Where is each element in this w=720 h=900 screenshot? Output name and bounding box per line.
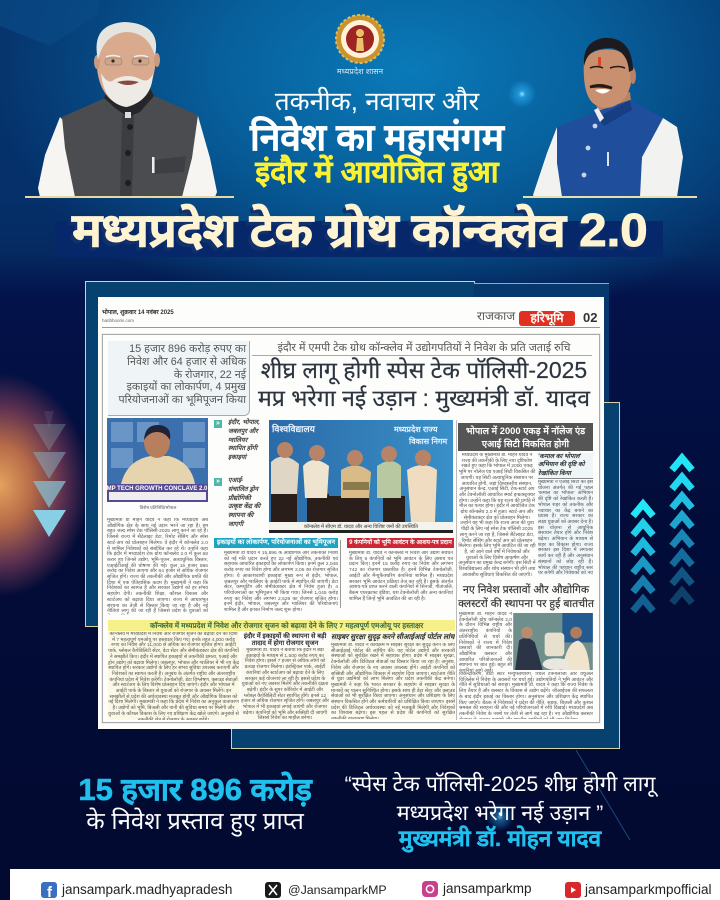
x handle: @JansamparkMP (288, 883, 387, 897)
ribbon text: red: मुख्यमंत्री डॉ. यादव ने कॉन्क्लेव में निवेश और उद्योग संवर्धन के लिए 9 कंपनियों को भूमि आवंटन के लिए आशय पत्र प्रदान किए। इनमें 15 करोड़ रुपए का निवेश और लगभग 742 का रोजगार प्रस्तावित है। इनमें विभिन्न टेक्नोलॉजी, आईटी और मैन्युफैक्चरिंग कंपनियां शामिल हैं। मध्यप्रदेश सरकार भूमि आवंटन प्रक्रिया तेज कर रही है। इसके अंतर्गत आशय-पत्र प्राप्त करने वाली कंपनियों में सिनर्जी, गीतांजलि, बैकम एयरक्राफ्ट इंडिया, यश टेक्नोलॉजी और अन्य कंपनियां शामिल हैं जिन्हें भूमि आवंटित की जा रही है। (349, 551, 453, 602)
quote attribution: मुख्यमंत्री डॉ. मोहन यादव (399, 826, 601, 851)
instagram handle: jansamparkmp (443, 881, 532, 896)
frame: back panel bottom (231, 402, 620, 749)
lower article middle heading: तादाद में होगा रोजगार सृजन (252, 640, 318, 647)
summary box: निवेश और 64 हजार से अधिक (127, 356, 246, 368)
icon: instagram (422, 881, 438, 897)
bullet marker one: » (216, 420, 220, 427)
right column divider (456, 420, 457, 720)
title band (55, 221, 663, 257)
side box heading (538, 453, 593, 479)
icon: facebook (41, 882, 57, 898)
dark box header: भोपाल में 2000 एकड़ में नॉलेज एंड (466, 425, 585, 436)
lower article middle heading (244, 632, 327, 647)
photo: award ceremony: कॉन्क्लेव में सीएम डॉ. यादव और अन्य विशिष्ट जनों की उपस्थिति (304, 523, 418, 530)
ribbon: blue: इकाइयों का लोकार्पण, परियोजनाओं का भूमिपूजन (217, 539, 335, 546)
bullet marker two (214, 478, 222, 486)
ribbon: blue (214, 538, 338, 548)
dark box header: एआई सिटी विकसित होगी (482, 438, 569, 449)
main title: मध्यप्रदेश टेक ग्रोथ कॉन्क्लेव 2.0 (72, 204, 648, 256)
quote: मध्यप्रदेश भरेगा नई उड़ान ” (397, 800, 603, 824)
summary box: के रोजगार, 22 नई (174, 369, 246, 381)
summary box: परियोजनाओं का भूमिपूजन किया (119, 394, 246, 406)
photo: speaker: MP TECH GROWTH CONCLAVE 2.0 (107, 486, 208, 492)
decorative triangles: left (33, 411, 66, 537)
ribbon: red (347, 538, 454, 548)
gold line under right portrait (523, 196, 697, 198)
newspaper logo: हरिभूमि (530, 311, 564, 325)
quote: “स्पेस टेक पॉलिसी-2025 शीघ्र होगी लागू (345, 772, 655, 796)
kicker: इंदौर में एमपी टेक ग्रोथ कॉन्क्लेव में उद्योगपतियों ने निवेश के प्रति जताई रुचि (278, 342, 570, 354)
summary box: 15 हजार 896 करोड़ रुपए का (129, 343, 246, 355)
newspaper website: haribhoomi.com (102, 318, 134, 323)
column heading: new proposals: नए निवेश प्रस्तावों और औद्योगिक (463, 584, 589, 596)
yellow band heading: कॉन्क्लेव में मध्यप्रदेश में निवेश और रोजगार सृजन को बढ़ावा देने के लिए 7 महत्वपूर्ण एमओयू पर हस्ताक्षर (150, 621, 423, 630)
photo: award ceremony: विश्वविद्यालय (271, 423, 316, 434)
emblem caption: मध्यप्रदेश शासन (337, 67, 383, 76)
stat: investment figure: 15 हजार 896 करोड़ (78, 772, 312, 807)
side box heading: रेखांकित किया (538, 470, 571, 477)
dark box header (458, 423, 593, 451)
page number: 02 (583, 310, 597, 325)
summary box: इकाइयों का लोकार्पण, 4 प्रमुख (127, 381, 246, 393)
photo: speaker (107, 418, 208, 502)
bullet marker one (214, 420, 222, 428)
kicker rule (252, 355, 592, 356)
photo: award ceremony (269, 420, 453, 533)
article border (102, 334, 600, 723)
side box heading: 'कमाल का भोपाल' (538, 453, 581, 460)
stat: caption: के निवेश प्रस्ताव हुए प्राप्त (86, 808, 304, 835)
icon: hexagon backdrop (0, 0, 80, 46)
headline: मप्र भरेगा नई उड़ान : मुख्यमंत्री डॉ. यादव (258, 384, 590, 410)
bullet one: इंदौर, भोपाल, जबलपुर और ग्वालियर स्थापित होंगी इकाइयां (228, 419, 260, 461)
headline (258, 357, 590, 412)
headline: शीघ्र लागू होगी स्पेस टेक पॉलिसी-2025 (261, 357, 587, 383)
lower article middle text: मुख्यमंत्री डॉ. यादव ने बताया कि इंदौर में बड़ी इकाइयों के माध्यम से 1,500 करोड़ रुपए का निवेश होगा। इससे 7 हजार से अधिक लोगों को प्रत्यक्ष रोजगार मिलेगा। इंडस्ट्रियल पार्क, आईटी कंपनियां और स्टार्टअप को बढ़ावा देने के लिए सरकार कई योजनाएं ला रही है। इससे प्रदेश के युवाओं को नए अवसर मिलेंगे और तकनीकी दक्षता बढ़ेगी। इंदौर के सुपर कॉरिडोर में आईटी और ग्लोबल कैपेबिलिटी सेंटर स्थापित होंगे। इनसे 12 हजार से अधिक रोजगार सृजित होंगे। जबलपुर और भोपाल में भी इकाइयां लगाई जाएंगी और रोजगार बढ़ेगा। कंपनियों को भूमि और सब्सिडी दी जाएगी जिससे निवेश का माहौल बनेगा। (241, 648, 329, 720)
lower article middle heading: इंदौर में इकाइयों की स्थापना से बड़ी (244, 633, 326, 640)
portrait: left leader (38, 22, 217, 196)
photo: award ceremony: विकास निगम (408, 436, 448, 446)
yellow band heading (108, 620, 455, 631)
column heading: new proposals (458, 583, 594, 610)
newspaper dateline: भोपाल, शुक्रवार 14 नवंबर 2025 (102, 310, 174, 316)
ribbon text: blue: मुख्यमंत्री डॉ यादव ने 15,896 के औद्योगिक और तकनीकी निवेश को नई गति प्रदान करते हुए 22 नई औद्योगिक, तकनीकी एवं सहायक आधारित इकाइयों का लोकार्पण किया। इनमें कुल 2,048 करोड़ रुपए का निवेश होगा और लगभग 2,05 का रोजगार सृजित होगा। ये आकाशवाणी इकाइयां मुख्य रूप से इंदौर, भोपाल, जबलपुर और ग्वालियर के आईटी पार्क में स्थापित की जाएंगी। डेटा सेंटर, कम्प्यूटिंग और सेमीकंडक्टर क्षेत्र में निवेश हुआ है। 4 परियोजनाओं का भूमिपूजन भी किया गया। जिनसे 1,045 करोड़ रुपए का निवेश और लगभग 2,529 का रोजगार सृजित होगा। इनमें इंदौर, भोपाल, जबलपुर और ग्वालियर की परियोजनाएं शामिल हैं और इनका निर्माण जल्द शुरू होगा। (224, 551, 338, 613)
dark box text: मध्यप्रदेश के मुख्यमंत्री डॉ. मोहन यादव ने राज्य की तकनीकी के लिए नया दृष्टिकोण रखते हुए कहा कि भोपाल में 2000 एकड़ भूमि पर नॉलेज एंड एआई सिटी विकसित की जाएगी। यह सिटी अत्याधुनिक संसाधन पर आधारित होगी, जहां विश्वस्तरीय संस्थान, अनुसंधान केन्द्र, एआई सिटी, टेक-स्टार्ट अप और टेक्नोलॉजी आधारित स्मार्ट इन्फ्रास्ट्रक्चर होगा। उन्होंने कहा कि यह राज्य की प्रगति में मील का पत्थर होगा। इंदौर में आयोजित टेक ग्रोथ कॉन्क्लेव 2.0 में हुआ। स्टार्ट-अप और सेमीकंडक्टर क्षेत्र को प्रोत्साहन मिलेगा। उन्होंने यह भी कहा कि राज्य आज की युवा पीढ़ी के लिए नई स्पेस टेक पॉलिसी 2025 लागू करने जा रहा है, जिससे सैटेलाइट डेटा, रिमोट सेंसिंग और स्टार्ट अप को प्रोत्साहन मिलेगा। इसके लिए भूमि आवंटित की जा रही है, जो आने वाले वर्षों में निवेशकों और युवाओं के लिए विशेष आकर्षण और अनुसंधान का प्रमुख केन्द्र बनेगी। इस सिटी में विश्वविद्यालय और शोध संस्थान भी होंगे तथा आवासीय सुविधाएं विकसित की जाएंगी। (458, 453, 536, 578)
facebook handle: jansampark.madhyapradesh (62, 882, 232, 897)
newspaper logo (519, 311, 575, 326)
frame: back panel right (474, 283, 609, 404)
social bar (10, 869, 720, 900)
decorative chevrons: right (630, 452, 695, 614)
gold line under left portrait (25, 196, 234, 198)
divider bracket (340, 540, 341, 608)
icon: x (265, 882, 281, 898)
section name: राजकाज (477, 309, 515, 323)
heading: line two: निवेश का महासंगम (250, 117, 504, 158)
header rule (102, 327, 600, 328)
summary box (108, 341, 250, 416)
emblem: Madhya Pradesh government seal (335, 14, 385, 64)
youtube handle: jansamparkmpofficial (585, 882, 712, 897)
lower article right heading: साइबर सुरक्षा सुदृढ़ करने सीआईआई पोर्टल लांच (331, 632, 454, 641)
ribbon: red: 9 कंपनियों को भूमि आवंटन के आशय-पत्र प्रदान (349, 540, 452, 546)
bullets (214, 418, 262, 528)
lower article left: कॉन्क्लेव में मध्यप्रदेश में निवेश और रोजगार सृजन को बढ़ावा देने की दिशा में 7 महत्वपूर्ण एमओयू पर हस्ताक्षर किए गए। इनके तहत 4,000 करोड़ रुपए का निवेश और 11,000 से अधिक का रोजगार सृजित होगा। आईटी पार्क, ग्लोबल कैपेबिलिटी सेंटर, डेटा सेंटर और सेमीकंडक्टर क्षेत्र की कंपनियों ने समझौते किए। इंदौर में स्थापित इकाइयों से तकनीकी क्षमता, एआई और ड्रोन उद्योग को बढ़ावा मिलेगा। जबलपुर, भोपाल और ग्वालियर में भी नए केंद्र स्थापित होंगे। सरकार उद्योगों के लिए हर संभव सुविधा उपलब्ध कराएगी और निवेशकों का स्वागत करती है। अनुबंध के अंतर्गत राष्ट्रीय और अंतरराष्ट्रीय कंपनियां प्रदेश में निवेश करेंगी। टेक्नोलॉजी, डेटा विश्लेषण, क्लाउड सेवाओं और स्टार्टअप के लिए विशेष प्रोत्साहन दिए जाएंगे। इंदौर और भोपाल में आईटी पार्क के विस्तार से युवाओं को रोजगार के अवसर मिलेंगे। इन समझौतों से प्रदेश की अर्थव्यवस्था मजबूत होगी और औद्योगिक विकास को नई दिशा मिलेगी। मुख्यमंत्री ने कहा कि प्रदेश में निवेश का अनुकूल वातावरण है। उद्योगों को भूमि, बिजली और पानी की सुविधा समय पर मिलेगी और युवाओं के कौशल विकास के लिए नए प्रशिक्षण केंद्र खोले जाएंगे। अनुबंधों से तकनीकी क्षेत्र में रोजगार के अवसर बढ़ेंगे। (108, 632, 239, 720)
frame: back panel left (85, 281, 475, 627)
photo credit: विशेष प्रतिनिधि/भोपाल (140, 505, 176, 510)
icon: youtube (565, 882, 581, 898)
bullet two: एआई-संचालित ड्रोन प्रौद्योगिकी उत्कृष्ट केंद्र की स्थापना की जाएगी (228, 477, 260, 528)
heading: line one: तकनीक, नवाचार और (275, 86, 479, 116)
quote (345, 772, 658, 824)
heading: yellow line: इंदौर में आयोजित हुआ (255, 156, 499, 189)
bullet marker two: » (216, 478, 220, 485)
photo: meeting (513, 613, 593, 670)
photo: award ceremony: मध्यप्रदेश राज्य (393, 424, 438, 434)
column heading: new proposals: क्लस्टरों की स्थापना पर हुई बातचीत (458, 598, 594, 610)
newspaper page (98, 297, 604, 729)
side box heading: अभियान की दृष्टि को (538, 461, 584, 468)
portrait: right leader (533, 38, 683, 196)
